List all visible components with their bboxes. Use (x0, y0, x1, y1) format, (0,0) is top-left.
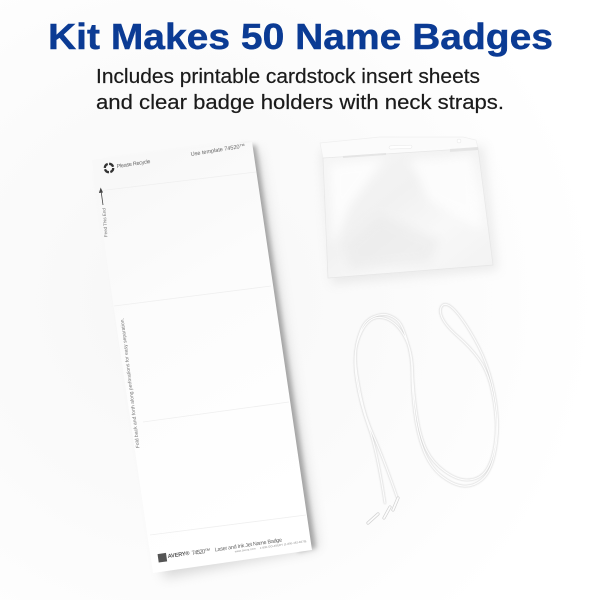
feed arrow: Feed This End (101, 208, 108, 237)
feed arrow (99, 188, 108, 237)
perforation instruction: Fold back and forth along perforations for easy separation. (120, 318, 141, 448)
neck straps (355, 304, 498, 523)
icon: recycle symbol (105, 164, 113, 172)
plastic sheen (330, 158, 385, 250)
subtitle: Includes printable cardstock insert sheets (96, 65, 480, 88)
strap clips (368, 498, 398, 523)
subtitle: and clear badge holders with neck straps. (96, 91, 504, 114)
sheet footer: Laser and Ink Jet Name Badge (214, 537, 283, 553)
sheet footer: www.avery.com (235, 546, 257, 553)
holder slot (389, 145, 412, 149)
strap cord (355, 304, 498, 503)
sheet footer: 74520™ (191, 547, 211, 557)
sheet footer (158, 537, 307, 563)
sheet top labels: Please Recycle (116, 159, 151, 170)
sheet top labels (116, 143, 246, 170)
title: Kit Makes 50 Name Badges (48, 16, 553, 57)
subtitle (96, 65, 504, 114)
insert sheet (92, 142, 318, 578)
badge holder (320, 137, 498, 284)
sheet footer: AVERY® (167, 550, 191, 560)
sheet top labels: Use template 74520™ (190, 143, 246, 158)
strap shadow (355, 304, 498, 503)
holder punch hole (457, 139, 461, 143)
holder pocket (323, 148, 493, 278)
sheet footer: 1-800-GO-AVERY (1-800-462-8379) (260, 539, 307, 550)
